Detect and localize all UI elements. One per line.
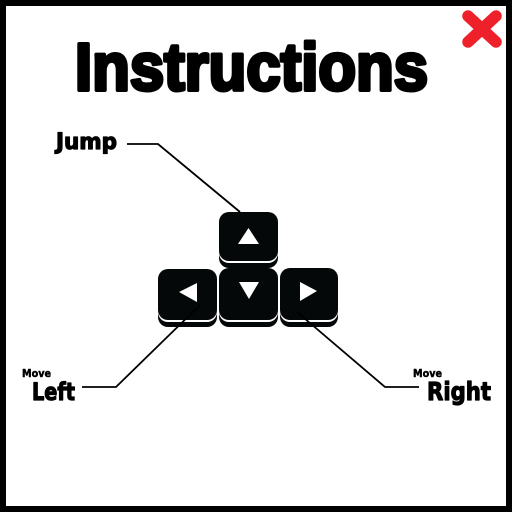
move right label <box>413 367 491 406</box>
key: left <box>158 269 217 327</box>
move left label <box>22 367 75 406</box>
move left label: Left <box>32 378 75 406</box>
keyboard arrow keys <box>158 212 338 327</box>
jump leader line <box>127 144 240 212</box>
key: up <box>219 212 278 268</box>
title: Instructions <box>75 30 428 105</box>
key: down <box>219 268 278 327</box>
move right label: Right <box>427 377 491 406</box>
move left label: Move <box>22 367 51 380</box>
move left leader line <box>82 305 200 387</box>
jump label: Jump <box>54 130 117 155</box>
icon: close button <box>468 16 496 42</box>
move right leader line <box>297 312 419 387</box>
move right label: Move <box>413 367 442 380</box>
key: right <box>280 268 338 327</box>
